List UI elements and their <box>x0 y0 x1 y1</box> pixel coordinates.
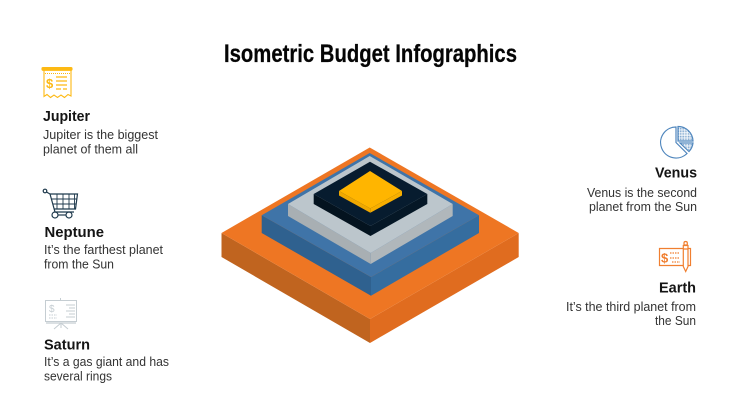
description: Earth: It’s the third planet from <box>566 300 696 314</box>
description: Saturn: several rings <box>44 370 112 384</box>
heading: Neptune: Neptune <box>44 224 104 241</box>
description: Jupiter: planet of them all <box>43 142 138 156</box>
icon: cheque and pencil: $ <box>661 250 669 266</box>
description: Neptune: It’s the farthest planet <box>44 243 164 257</box>
icon: receipt: $ <box>46 76 54 91</box>
description: Jupiter: Jupiter is the biggest <box>43 128 159 142</box>
description: Jupiter <box>43 128 159 156</box>
panel: Neptune <box>43 189 164 272</box>
icon: presentation board: $ <box>49 304 55 315</box>
layer: navy <box>314 162 427 236</box>
description: Neptune <box>44 243 164 272</box>
panel: Earth <box>566 242 696 328</box>
panel: Jupiter <box>42 68 159 156</box>
heading: Saturn: Saturn <box>44 336 90 354</box>
layer: yellow top <box>339 171 402 213</box>
layer: orange base <box>222 148 519 343</box>
description: Earth: the Sun <box>655 314 696 328</box>
heading: Earth: Earth <box>659 280 696 296</box>
description: Saturn: It’s a gas giant and has <box>44 355 169 369</box>
description: Venus: Venus is the second <box>587 186 697 200</box>
layer: gray <box>288 156 453 264</box>
heading: Jupiter: Jupiter <box>43 108 90 125</box>
description: Venus <box>587 186 697 214</box>
panel: Saturn <box>44 298 169 384</box>
icon: pie chart <box>661 126 693 158</box>
panel: Venus <box>587 126 697 214</box>
description: Earth <box>566 300 696 328</box>
icon: shopping cart <box>43 189 78 218</box>
description: Saturn <box>44 355 169 384</box>
heading: Venus: Venus <box>655 164 697 182</box>
title: Isometric Budget Infographics <box>224 40 517 68</box>
isometric pyramid chart <box>222 148 519 343</box>
description: Neptune: from the Sun <box>44 258 114 272</box>
description: Venus: planet from the Sun <box>589 200 697 214</box>
layer: blue <box>262 153 479 296</box>
